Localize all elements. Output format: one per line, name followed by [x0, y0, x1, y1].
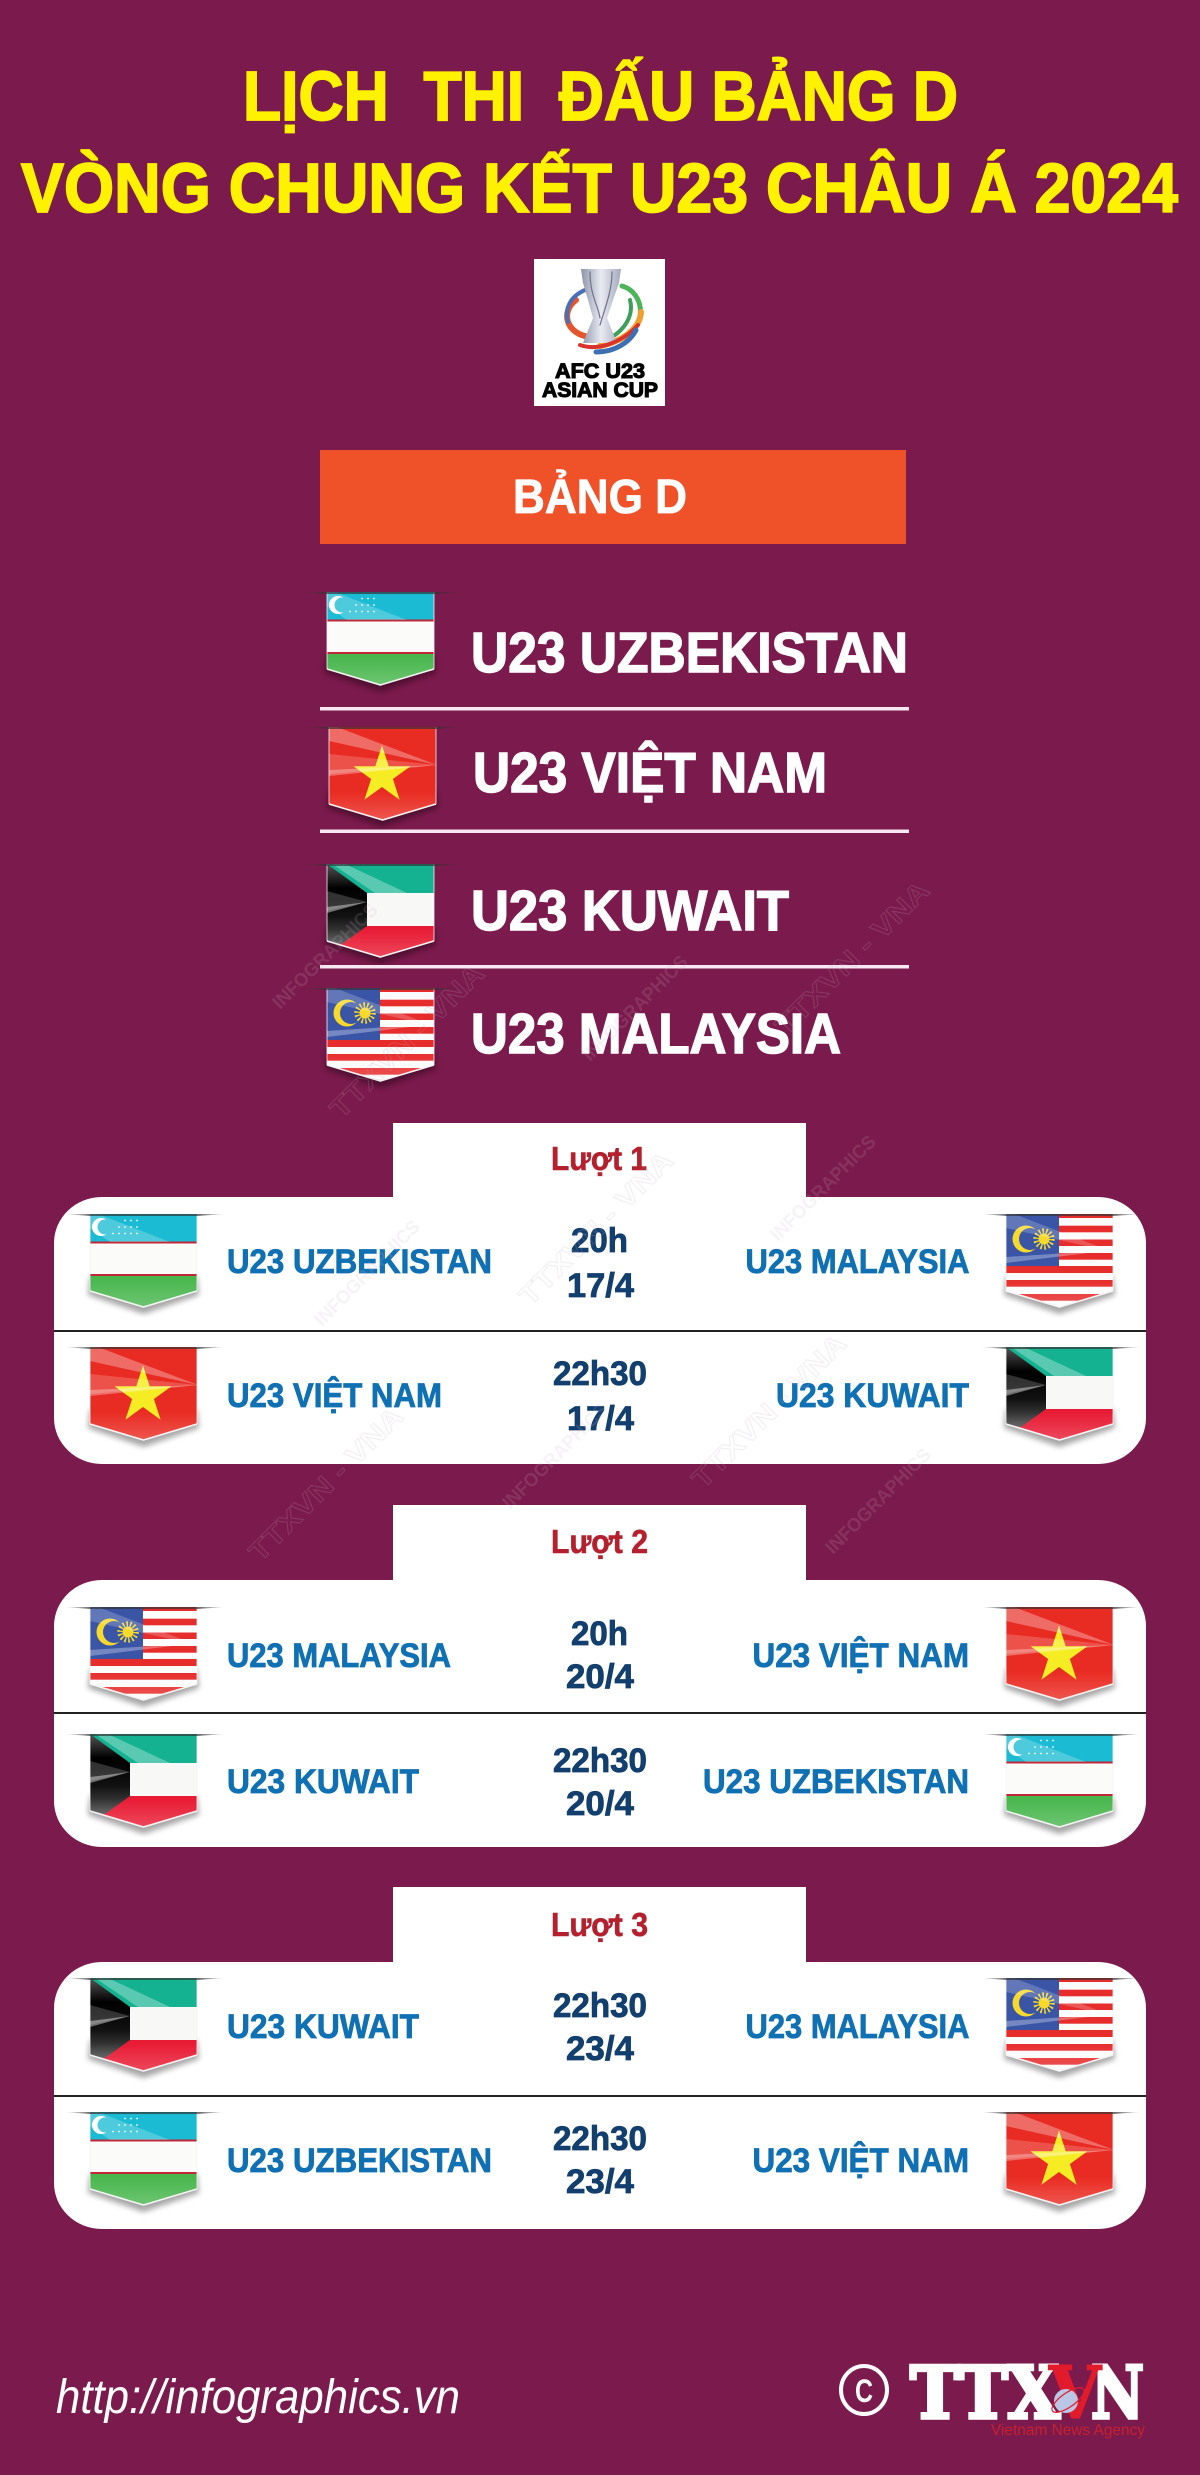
match: Uzbekistan vs Malaysia: U23 MALAYSIA	[746, 1243, 970, 1281]
match: Malaysia vs Viet Nam: 20h	[571, 1615, 628, 1653]
match: Kuwait vs Uzbekistan: U23 UZBEKISTAN	[703, 1763, 969, 1801]
icon: globe	[1048, 2383, 1088, 2417]
match: Uzbekistan vs Malaysia: 20h	[571, 1222, 628, 1260]
match: Malaysia vs Viet Nam	[64, 1607, 1142, 1707]
tab: Lượt 3: Lượt 3	[551, 1906, 648, 1943]
agency name: Vietnam News Agency	[991, 2422, 1145, 2439]
panel: round 2	[54, 1505, 1146, 1847]
match: Kuwait vs Uzbekistan: U23 KUWAIT	[227, 1763, 419, 1801]
team: Viet Nam: U23 VIỆT NAM	[473, 740, 827, 805]
match: Kuwait vs Uzbekistan: 22h30	[553, 1742, 647, 1780]
TTXVN wordmark	[910, 2350, 1144, 2435]
watermarks	[243, 875, 936, 1567]
match: Kuwait vs Uzbekistan: 20/4	[566, 1785, 634, 1823]
watermarks: TTXVN - VNA	[324, 958, 490, 1124]
match: Viet Nam vs Kuwait	[64, 1347, 1142, 1447]
tab: Lượt 1: Lượt 1	[551, 1140, 647, 1177]
tab: Lượt 3	[393, 1887, 806, 1967]
match: Uzbekistan vs Malaysia: 17/4	[567, 1267, 634, 1305]
team: Malaysia: U23 MALAYSIA	[471, 1002, 841, 1066]
icon: trophy with coloured ribbons	[567, 269, 641, 352]
match: Malaysia vs Viet Nam: 20/4	[566, 1658, 634, 1696]
footer logo: TTXVN	[841, 2350, 1145, 2439]
logo wordmark: AFC U23	[555, 360, 645, 383]
team list	[301, 592, 909, 1088]
group heading bar: Bảng D: BẢNG D	[513, 469, 687, 524]
team: Viet Nam	[303, 727, 827, 827]
tab: Lượt 2	[393, 1505, 806, 1585]
match: Malaysia vs Viet Nam: U23 VIỆT NAM	[752, 1637, 969, 1675]
match: Malaysia vs Viet Nam: U23 MALAYSIA	[227, 1637, 451, 1675]
watermarks: TTXVN - VNA	[686, 1328, 852, 1494]
watermarks: TTXVN - VNA	[769, 875, 935, 1041]
panel: round 3	[54, 1887, 1146, 2229]
title: LỊCH THI ĐẤU BẢNG D	[243, 57, 958, 135]
title	[21, 57, 1178, 227]
match: Viet Nam vs Kuwait: 22h30	[553, 1355, 647, 1393]
match: Kuwait vs Malaysia	[64, 1978, 1142, 2078]
match: Uzbekistan vs Viet Nam: U23 UZBEKISTAN	[227, 2142, 492, 2180]
match: Uzbekistan vs Viet Nam: U23 VIỆT NAM	[752, 2142, 969, 2180]
match: Uzbekistan vs Malaysia	[64, 1214, 1142, 1314]
tab: Lượt 2: Lượt 2	[551, 1523, 648, 1560]
watermarks: INFOGRAPHICS	[269, 900, 383, 1014]
match: Uzbekistan vs Malaysia: U23 UZBEKISTAN	[227, 1243, 492, 1281]
match: Kuwait vs Malaysia: 23/4	[566, 2030, 634, 2068]
match: Kuwait vs Malaysia: U23 KUWAIT	[227, 2008, 419, 2046]
match: Viet Nam vs Kuwait: U23 KUWAIT	[776, 1377, 969, 1415]
match: Uzbekistan vs Viet Nam	[64, 2112, 1142, 2212]
match: Uzbekistan vs Viet Nam: 23/4	[566, 2163, 634, 2201]
tab: Lượt 1	[393, 1123, 806, 1203]
icon: copyright: C	[855, 2373, 873, 2409]
match: Uzbekistan vs Viet Nam: 22h30	[553, 2120, 647, 2158]
group heading bar: Bảng D	[320, 450, 906, 544]
footer url: http://infographics.vn	[56, 2371, 460, 2424]
watermarks: INFOGRAPHICS	[499, 1400, 613, 1514]
watermarks: INFOGRAPHICS	[767, 1132, 881, 1246]
watermarks: TTXVN - VNA	[243, 1401, 409, 1567]
watermarks: INFOGRAPHICS	[822, 1445, 936, 1559]
match: Kuwait vs Malaysia: U23 MALAYSIA	[746, 2008, 970, 2046]
TTXVN wordmark: V	[1048, 2350, 1102, 2435]
team: Malaysia	[301, 988, 841, 1088]
TTXVN wordmark: TTX	[910, 2350, 1060, 2435]
panel: round 1	[54, 1123, 1146, 1464]
watermarks: TTXVN - VNA	[513, 1145, 679, 1311]
team: Uzbekistan	[301, 592, 908, 692]
watermarks: INFOGRAPHICS	[579, 952, 693, 1066]
logo wordmark: ASIAN CUP	[542, 379, 658, 402]
watermarks: INFOGRAPHICS	[311, 1217, 425, 1331]
match: Viet Nam vs Kuwait: 17/4	[567, 1400, 634, 1438]
team: Kuwait	[301, 864, 789, 964]
team: Uzbekistan: U23 UZBEKISTAN	[471, 621, 908, 685]
match: Viet Nam vs Kuwait: U23 VIỆT NAM	[227, 1377, 442, 1415]
logo wordmark	[542, 360, 658, 402]
logo: AFC U23 Asian Cup	[534, 259, 665, 406]
team: Kuwait: U23 KUWAIT	[471, 879, 789, 943]
TTXVN wordmark: N	[1091, 2350, 1144, 2435]
icon: copyright	[841, 2366, 887, 2414]
match: Kuwait vs Malaysia: 22h30	[553, 1987, 647, 2025]
match: Kuwait vs Uzbekistan	[64, 1734, 1142, 1834]
